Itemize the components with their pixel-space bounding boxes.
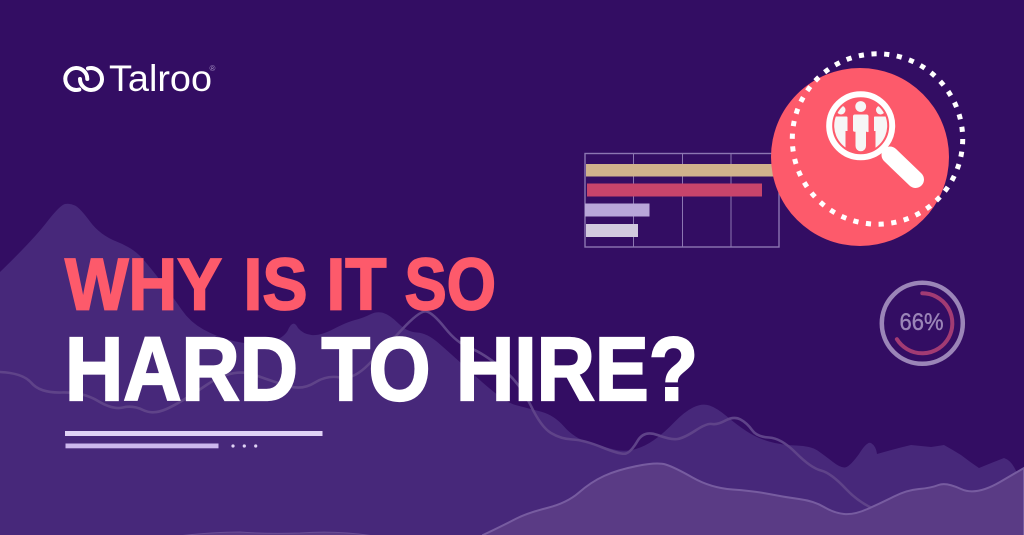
three dots <box>231 444 257 448</box>
icon: magnifier with people <box>829 94 916 180</box>
low foothill ridge <box>170 532 380 535</box>
front mountain range <box>483 464 1024 535</box>
background mountains <box>0 204 1024 535</box>
bar chart <box>585 154 779 247</box>
gauge value: 66% <box>900 309 944 336</box>
short rule <box>66 444 218 448</box>
coral circle <box>771 68 949 246</box>
magnifier handle <box>890 155 916 180</box>
bar: crimson <box>587 184 762 196</box>
title line 1 <box>65 244 496 325</box>
icon: linked rings <box>65 68 102 90</box>
back mountain range <box>0 204 1024 535</box>
title line 2: HIRE? <box>456 320 698 420</box>
bar: pale grey <box>586 224 638 237</box>
title line 1: IT <box>326 244 386 325</box>
people in lens <box>832 101 888 151</box>
title line 2: HARD <box>65 320 298 420</box>
registered mark: ® <box>210 64 216 73</box>
title line 1: SO <box>404 244 496 325</box>
long rule <box>65 431 322 436</box>
title <box>65 244 698 420</box>
gauge outer ring <box>882 283 963 364</box>
bar: tan <box>586 164 778 176</box>
title line 1: IS <box>244 244 308 325</box>
lens ring <box>829 94 892 157</box>
chart grid <box>585 154 779 247</box>
title line 2 <box>65 320 698 420</box>
dotted white ring <box>792 54 963 224</box>
progress gauge 66% <box>882 283 963 364</box>
logo: Talroo <box>65 58 216 99</box>
title line 1: WHY <box>65 244 222 325</box>
search badge <box>771 54 963 246</box>
gauge progress arc <box>897 293 952 353</box>
logo wordmark: Talroo <box>109 58 212 99</box>
decorative underline <box>65 431 322 448</box>
magnifier neck <box>883 148 892 157</box>
bar: lavender <box>585 204 650 216</box>
winding trend line <box>0 311 921 535</box>
title line 2: TO <box>322 320 430 420</box>
